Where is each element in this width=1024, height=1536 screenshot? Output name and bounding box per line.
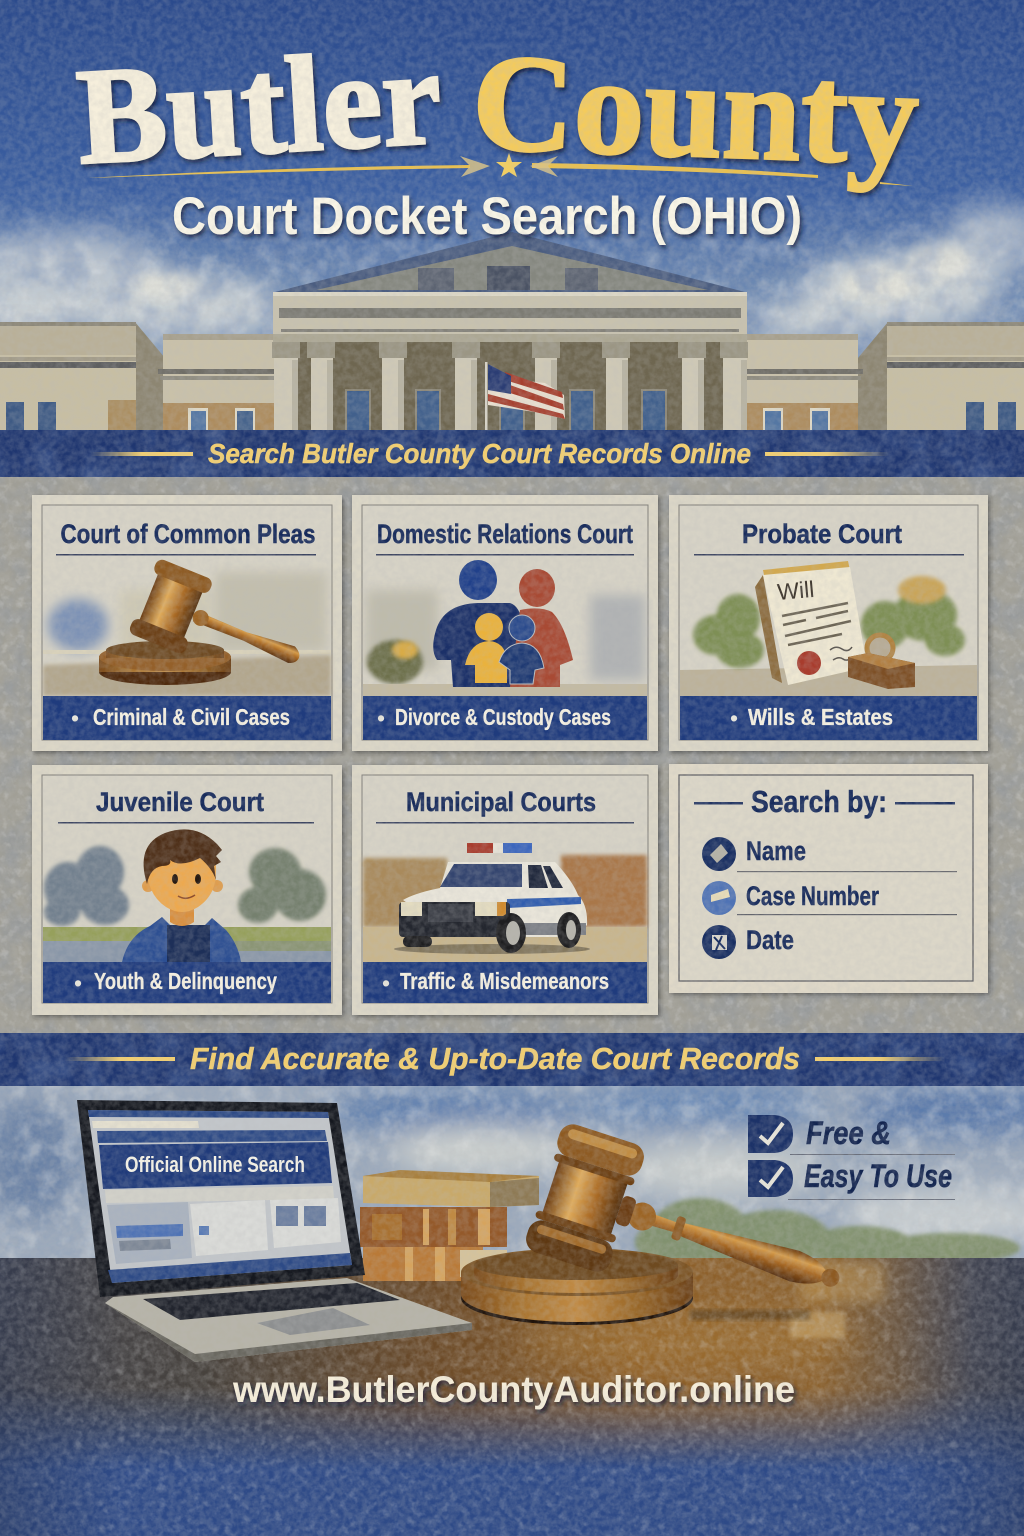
wings — [158, 334, 863, 432]
icon: police car — [394, 843, 590, 954]
table — [0, 1258, 1024, 1468]
item: Name — [702, 836, 957, 872]
footer label: • — [730, 705, 738, 731]
footer label — [43, 962, 331, 1003]
windows — [346, 390, 666, 432]
icon: will document — [755, 561, 867, 685]
bottom sky — [0, 1083, 1024, 1266]
icon: boy — [122, 829, 241, 962]
checkbox: easy — [748, 1158, 955, 1200]
footer label: • — [382, 970, 390, 996]
checkbox: free — [748, 1115, 955, 1155]
footer label: Youth & Delinquency — [94, 968, 277, 994]
heading: Municipal Courts — [406, 787, 596, 817]
icon: will document: Will — [776, 576, 815, 605]
panel: Probate Court — [669, 495, 988, 751]
American flag — [485, 362, 565, 432]
title: Butler County — [73, 20, 921, 194]
middle stone background — [0, 476, 1024, 1036]
pediment — [275, 232, 745, 292]
footer label: • — [377, 705, 385, 731]
icon: large gavel — [461, 1121, 860, 1344]
portico shadow — [278, 342, 742, 432]
icon: box and seal — [848, 635, 915, 689]
footer label: Divorce & Custody Cases — [395, 704, 611, 730]
scene backdrop — [43, 572, 331, 696]
entablature — [273, 292, 747, 342]
scene backdrop — [680, 576, 977, 696]
scene backdrop — [43, 846, 331, 962]
left outer block — [0, 322, 165, 432]
item: Case Number — [702, 881, 957, 915]
icon: gavel on block — [99, 558, 314, 696]
courthouse — [0, 232, 1024, 432]
footer label: Traffic & Misdemeanors — [400, 968, 609, 994]
footer label — [363, 696, 647, 740]
carpet speckle — [0, 1258, 1024, 1536]
footer label: Wills & Estates — [748, 704, 893, 730]
title: Butler County: County — [470, 25, 921, 194]
icon: laptop — [77, 1100, 472, 1362]
panel: Court of Common Pleas — [32, 495, 342, 751]
checkbox: free: Free & — [806, 1115, 891, 1151]
icon: stacked books — [360, 1170, 539, 1281]
banner: search online: Search Butler County Court Records Online — [208, 438, 751, 469]
panel: Domestic Relations Court — [352, 495, 658, 751]
checklist: free and easy — [748, 1115, 955, 1200]
subtitle: Court Docket Search (OHIO) — [172, 187, 802, 246]
right outer block — [858, 322, 1024, 432]
sky background — [0, 0, 1024, 432]
screen — [88, 1110, 352, 1283]
item: Date — [702, 925, 794, 959]
footer label — [363, 962, 647, 1003]
banner: accurate records — [0, 1033, 1024, 1086]
heading: Domestic Relations Court — [377, 519, 633, 549]
heading: Juvenile Court — [96, 787, 264, 817]
distant trees — [635, 1198, 1020, 1266]
panel: Juvenile Court — [32, 765, 342, 1015]
footer label: • — [74, 970, 82, 996]
footer label — [43, 696, 331, 740]
item: Name: Name — [746, 836, 806, 866]
checkbox: easy: Easy To Use — [804, 1158, 952, 1194]
footer label: • — [71, 705, 79, 731]
item: Case Number: Case Number — [746, 881, 879, 911]
title ornament — [88, 153, 913, 186]
gavel block — [461, 1248, 693, 1325]
carpet base — [0, 1258, 1024, 1536]
title: Butler County: Butler — [73, 20, 445, 193]
panel: Search by — [669, 764, 988, 993]
item: Date: Date — [746, 925, 794, 955]
heading: Search by: — [751, 784, 887, 819]
heading: Probate Court — [742, 519, 902, 549]
heading: Court of Common Pleas — [60, 519, 316, 549]
footer label — [680, 696, 977, 740]
scene backdrop — [363, 590, 647, 696]
gavel head and handle — [522, 1121, 860, 1344]
banner: search online — [0, 430, 1024, 477]
clouds behind building — [0, 175, 1024, 350]
banner: accurate records: Find Accurate & Up-to-Date Court Records — [190, 1041, 800, 1076]
columns — [272, 342, 748, 432]
footer label: Criminal & Civil Cases — [93, 704, 290, 730]
panel: Municipal Courts — [352, 765, 658, 1015]
scene backdrop — [363, 855, 647, 962]
website url: www.ButlerCountyAuditor.online — [232, 1369, 795, 1410]
icon: family — [433, 560, 573, 687]
screen: Official Online Search — [125, 1152, 305, 1177]
